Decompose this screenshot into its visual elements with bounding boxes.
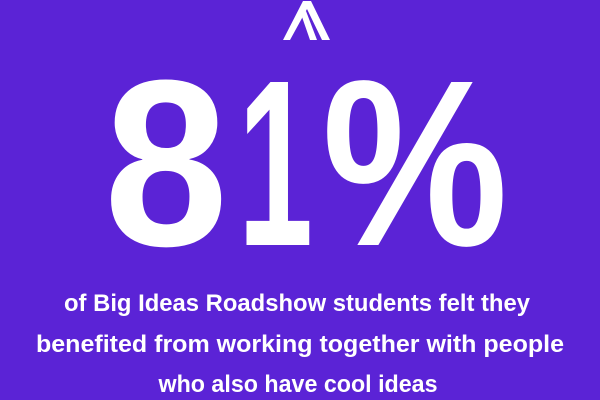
- headline: 81%: 8: [104, 31, 228, 296]
- headline: 81%: [104, 31, 508, 296]
- headline: 81%: 1: [238, 31, 313, 296]
- icon: logo: [283, 1, 330, 40]
- text block: description: of Big Ideas Roadshow students felt they: [64, 290, 531, 317]
- headline: 81%: %: [322, 31, 508, 296]
- text block: description: benefited from working together with people: [36, 331, 564, 358]
- text block: description: who also have cool ideas: [158, 371, 438, 398]
- text block: description: [36, 290, 564, 398]
